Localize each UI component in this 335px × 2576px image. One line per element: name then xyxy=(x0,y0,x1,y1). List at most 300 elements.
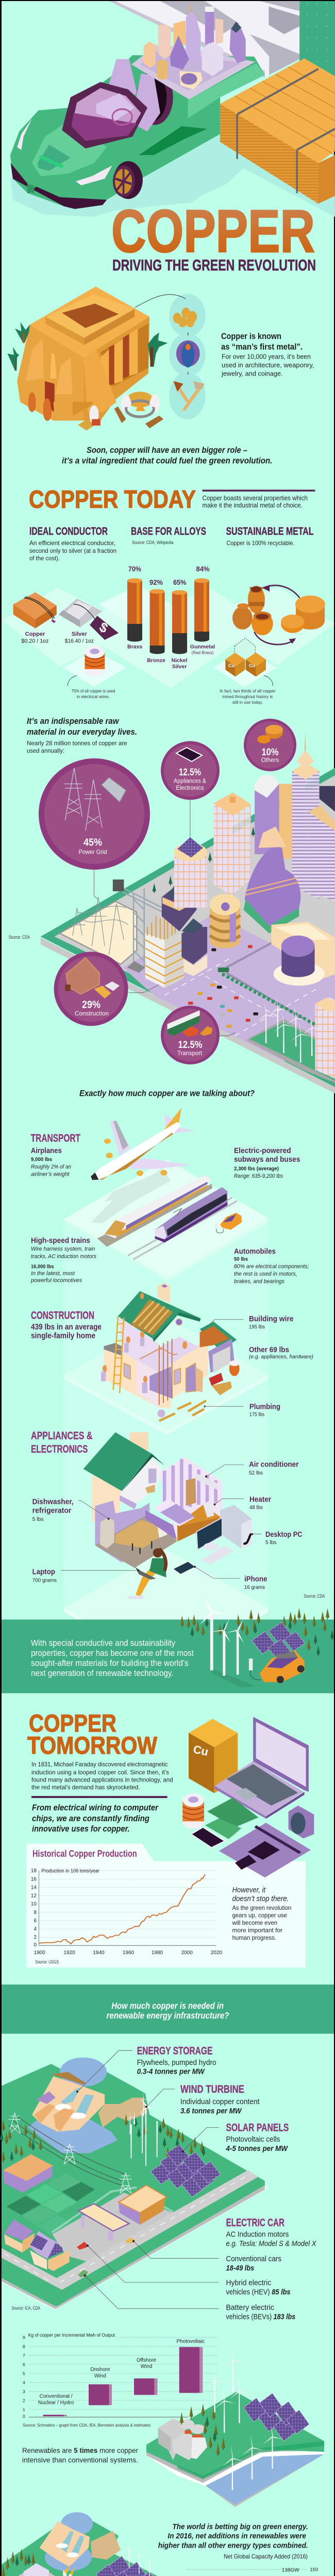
icon: phone xyxy=(176,748,202,761)
panel: green band with renewable scene: sought-after materials for building the world’s xyxy=(31,1658,189,1668)
transport labels: 50 lbs xyxy=(234,1257,248,1262)
bar chart: net global capacity added: 138GW xyxy=(282,2568,299,2573)
dam xyxy=(32,2076,105,2132)
renewable labels: vehicles (HEV) 85 lbs xyxy=(226,2289,291,2297)
appliances labels: refrigerator xyxy=(32,1506,72,1515)
heading: copper tomorrow xyxy=(27,1709,158,1759)
illustration: transport vehicles xyxy=(91,1108,242,1259)
circle: 10% others xyxy=(244,719,296,771)
heading: copper today xyxy=(29,486,315,513)
intro text: For over 10,000 years, it’s been xyxy=(222,353,311,361)
bar chart: kg of copper per MWh: Nuclear / Hydro xyxy=(38,2400,74,2406)
circle: 12.5% transport: Transport xyxy=(177,1049,203,1057)
silo towers xyxy=(255,784,279,854)
panel: ideal conductor: 75% of all copper is used xyxy=(71,688,115,693)
text block: betting big on green energy: Net Global Capacity Added (2016) xyxy=(224,2553,308,2560)
line chart: 1980 xyxy=(152,1950,163,1956)
icon: house frame xyxy=(65,958,120,998)
circle: appliances and electronics xyxy=(161,741,220,800)
bar chart: net global capacity added: 150 xyxy=(310,2567,318,2573)
bar chart: kg of copper per MWh xyxy=(23,2333,217,2428)
construction labels: CONSTRUCTION xyxy=(31,1310,94,1321)
text block: everyday uses: used annually: xyxy=(27,747,64,754)
solar round tower xyxy=(174,852,207,908)
question heading: Exactly how much copper are we talking about? xyxy=(79,1089,255,1098)
circle: 12.5% transport xyxy=(161,1006,220,1064)
construction labels: (e.g. appliances, hardware) xyxy=(249,1354,313,1360)
callout: renewables intensity: intensive than conventional systems. xyxy=(22,2455,138,2464)
renewable labels: Source: ICA, CDA xyxy=(11,2306,40,2311)
circle: 12.5% transport: 12.5% xyxy=(178,1040,203,1050)
appliances labels: 5 lbs xyxy=(32,1516,44,1522)
guitar building xyxy=(245,847,300,926)
appliances labels: Source: CDA xyxy=(304,1594,325,1599)
renewable labels: 4-5 tonnes per MW xyxy=(226,2145,288,2153)
gas station and building xyxy=(53,2193,173,2262)
callout: however: As the green revolution xyxy=(232,1904,291,1911)
panel: sustainable metal: Copper is 100% recyclable. xyxy=(226,539,294,547)
heading: copper today: COPPER TODAY xyxy=(29,486,196,513)
renewable labels: SOLAR PANELS xyxy=(226,2122,289,2134)
renewable labels: 0.3-4 tonnes per MW xyxy=(137,2068,205,2076)
text block: betting big on green energy: higher than all other energy types combined. xyxy=(158,2541,308,2550)
reactor xyxy=(158,2418,188,2460)
construction labels: 439 lbs in an average xyxy=(31,1323,102,1332)
panel: green band with renewable scene: next generation of renewable technology. xyxy=(31,1668,174,1678)
panel: ideal conductor: of the cost). xyxy=(29,554,60,562)
trees xyxy=(153,883,156,893)
transport labels: powerful locomotives xyxy=(30,1278,82,1284)
isometric floor behind properties xyxy=(2,586,334,688)
circle: 29% construction: 29% xyxy=(82,999,100,1011)
road xyxy=(2,2170,259,2290)
high-speed train xyxy=(97,1175,212,1247)
transport labels: Electric-powered xyxy=(234,1146,291,1155)
illustration: isometric city xyxy=(41,732,335,1093)
heading: copper tomorrow: COPPER xyxy=(29,1709,116,1737)
bar chart: kg of copper per MWh: 2 xyxy=(23,2398,25,2403)
panel: ideal conductor: IDEAL CONDUCTOR xyxy=(29,526,108,537)
bar chart: kg of copper per MWh: 3 xyxy=(23,2389,25,2394)
panel: base for alloys: 92% xyxy=(149,578,163,586)
transport labels: airliner’s weight xyxy=(31,1172,70,1178)
renewable labels: 3.6 tonnes per MW xyxy=(180,2107,242,2115)
line chart: 1920 xyxy=(64,1950,75,1956)
line chart: 4 xyxy=(34,1926,37,1932)
panel: sustainable metal: In fact, two thirds of all copper xyxy=(220,688,276,693)
city on the car xyxy=(131,3,255,99)
text block: Faraday: the red metal’s demand has skyrocketed. xyxy=(31,1784,140,1791)
lake xyxy=(60,2058,107,2087)
renewable labels: ELECTRIC CAR xyxy=(226,2217,284,2229)
line chart: 14 xyxy=(31,1885,37,1891)
panel: green band with renewable scene xyxy=(2,1597,334,1693)
tram xyxy=(128,1187,237,1259)
bar chart: kg of copper per MWh: 9 xyxy=(23,2335,25,2340)
panel: historical copper production xyxy=(26,1843,306,1968)
text block: Faraday xyxy=(31,1761,173,1834)
circle: appliances and electronics: Appliances & xyxy=(174,778,206,784)
text block: everyday uses: Nearly 28 million tonnes of copper are xyxy=(27,740,127,747)
text block: Faraday: innovative uses for copper. xyxy=(32,1824,130,1834)
workers xyxy=(103,1293,187,1383)
illustration: house under construction xyxy=(101,1283,244,1421)
renewable labels: Photovoltaic cells xyxy=(226,2136,280,2144)
transport labels: Airplanes xyxy=(31,1146,62,1155)
road lines and lots xyxy=(226,942,306,1020)
connector lines xyxy=(94,800,235,1036)
transport labels: TRANSPORT xyxy=(31,1132,80,1144)
construction labels: Plumbing xyxy=(249,1402,280,1411)
transport labels: brakes, and bearings xyxy=(234,1279,284,1285)
icon: pots xyxy=(257,725,283,743)
construction building xyxy=(145,931,183,988)
panel: ideal conductor: in electrical wires. xyxy=(77,694,110,699)
turbines xyxy=(123,2541,136,2568)
line chart: 6 xyxy=(34,1918,37,1924)
renewable labels: Hybrid electric xyxy=(226,2279,271,2287)
heading: copper tomorrow: TOMORROW xyxy=(27,1732,158,1759)
panel: ideal conductor: Silver xyxy=(72,631,88,637)
bar chart: kg of copper per MWh: 8 xyxy=(23,2344,25,2349)
bar chart: kg of copper per MWh: 0 xyxy=(23,2414,25,2419)
monitor and tower xyxy=(220,1505,252,1549)
appliances labels: 48 lbs xyxy=(249,1504,263,1511)
illustration: stacked copper sheets xyxy=(220,58,335,204)
band: renewable question xyxy=(2,1985,334,2034)
panel: base for alloys: Brass xyxy=(127,644,142,650)
renewable labels: Conventional cars xyxy=(226,2255,281,2263)
panel: ideal conductor: Copper xyxy=(25,631,45,637)
line chart: 10 xyxy=(31,1901,37,1907)
appliances labels: Desktop PC xyxy=(265,1530,303,1539)
panel: base for alloys: Silver xyxy=(172,664,187,670)
arena xyxy=(271,922,335,978)
renewable labels: AC Induction motors xyxy=(226,2230,289,2239)
renewable labels: ENERGY STORAGE xyxy=(137,2045,212,2057)
illustration: green convertible car carrying a city xyxy=(10,3,335,217)
line chart: 2 xyxy=(34,1935,37,1940)
crane xyxy=(122,887,177,968)
fire camp workers xyxy=(127,392,153,408)
line chart: 8 xyxy=(34,1910,37,1916)
line chart: 2000 xyxy=(181,1950,193,1956)
heading: copper today: make it the industrial metal of choice. xyxy=(202,502,303,509)
turbines xyxy=(256,1003,277,1043)
renewable labels: Individual copper content xyxy=(180,2098,260,2106)
toolbox and coil xyxy=(209,1373,223,1386)
text block: betting big on green energy: The world is betting big on green energy. xyxy=(172,2522,308,2531)
roof xyxy=(118,1291,201,1338)
callout: however: doesn’t stop there. xyxy=(232,1895,289,1903)
transport labels: Automobiles xyxy=(234,1247,276,1256)
panel: base for alloys: Bronze xyxy=(147,657,165,664)
callout: however: However, it xyxy=(232,1886,266,1894)
circle: 45% power grid: Power Grid xyxy=(78,848,107,855)
source: Source: CDA xyxy=(9,935,30,940)
panel: sustainable metal xyxy=(220,526,325,705)
transport labels: 9,000 lbs xyxy=(31,1157,52,1162)
text block: Faraday: found many advanced applications in technology, and xyxy=(31,1776,173,1784)
panel: sustainable metal: Cu xyxy=(228,663,234,668)
translucent column behind the three platforms xyxy=(64,1159,268,1671)
renewable labels: vehicles (BEVs) 183 lbs xyxy=(226,2313,295,2321)
panel: sustainable metal: Cu xyxy=(249,663,255,668)
transport labels: the rest is used in motors, xyxy=(234,1271,297,1277)
transport labels: Wire harness system, train xyxy=(31,1246,95,1252)
illustration: ancient Egyptian temple xyxy=(8,286,206,420)
connectors xyxy=(85,2089,219,2309)
cliffs xyxy=(98,2097,147,2127)
line chart: 2020 xyxy=(211,1950,223,1956)
illustration: copper cube, laptop and electronics xyxy=(182,1717,314,1877)
appliances labels: Air conditioner xyxy=(249,1460,299,1469)
icon: pylons xyxy=(64,768,126,831)
text block: everyday uses: It’s an indispensable raw xyxy=(27,717,120,726)
transport labels: High-speed trains xyxy=(31,1236,90,1245)
line chart: 1940 xyxy=(93,1950,105,1956)
circle: 10% others: 10% xyxy=(262,747,279,758)
circle: 29% construction: Construction xyxy=(75,1010,109,1017)
intro text: used in architecture, weaponry, xyxy=(222,362,314,369)
parking tower xyxy=(210,904,240,941)
pylons and power lines xyxy=(9,2115,126,2185)
right bottom tower xyxy=(315,997,335,1078)
appliances labels: ELECTRONICS xyxy=(31,1443,88,1455)
transport labels: Range: 635-9,200 lbs xyxy=(234,1173,283,1179)
icon: recycling pots and cubes xyxy=(225,585,325,686)
circle: 45% power grid: 45% xyxy=(83,837,102,848)
bar chart: kg of copper per MWh: Source: Schroders – graph from CDA, IEA, Bernstein analysis & estimates xyxy=(23,2422,150,2428)
transport labels: In the latest, most xyxy=(31,1270,75,1277)
illustration: renewable energy landscape map xyxy=(0,2058,268,2310)
icon: copper sheets and silver bars: $ xyxy=(97,619,110,636)
icon: bus and cars xyxy=(167,1010,212,1037)
appliances labels: Heater xyxy=(249,1495,271,1504)
appliances labels: 52 lbs xyxy=(249,1470,263,1476)
transport labels: 2,300 lbs (average) xyxy=(234,1166,279,1172)
text block: Faraday: chips, we are constantly finding xyxy=(32,1814,150,1823)
bar chart: kg of copper per MWh: Offshore xyxy=(137,2358,157,2363)
callout: green revolution: Soon, copper will have an even bigger role – xyxy=(87,446,247,455)
cars xyxy=(77,2242,88,2250)
bar chart: net global capacity added xyxy=(116,2567,318,2576)
renewable labels xyxy=(11,2045,317,2321)
bar chart: kg of copper per MWh: 1 xyxy=(23,2407,25,2412)
text block: betting big on green energy: In 2016, net additions in renewables were xyxy=(167,2532,306,2540)
band: renewable question: How much copper is needed in xyxy=(111,2001,224,2011)
line chart xyxy=(31,1868,223,1956)
circle: 45% power grid xyxy=(39,758,150,870)
line chart: 1900 xyxy=(34,1950,45,1956)
intro text: Copper is known xyxy=(221,331,281,341)
callout: renewables intensity xyxy=(22,2446,138,2464)
cube xyxy=(189,1719,238,1793)
round icons xyxy=(169,294,206,337)
solar xyxy=(96,2565,119,2576)
plane shadow xyxy=(91,1168,171,1224)
callout: however: gears up, copper use xyxy=(232,1912,287,1919)
illustration: power plant island xyxy=(1,2512,179,2576)
illustration: coastal island with turbines and solar xyxy=(146,2346,324,2507)
callout: green revolution: it’s a vital ingredient that could fuel the green revolution. xyxy=(62,456,272,466)
houses xyxy=(4,2219,33,2241)
bar chart: kg of copper per MWh: 5 xyxy=(23,2371,25,2376)
circle: 10% others: Others xyxy=(261,757,279,764)
panel: ideal conductor: $16.40 / 1oz xyxy=(65,638,94,644)
peach tower xyxy=(213,803,233,896)
appliances labels: Laptop xyxy=(32,1568,55,1577)
line chart: 18 xyxy=(31,1868,37,1874)
construction labels xyxy=(31,1310,313,1417)
plane xyxy=(91,1108,195,1180)
line chart: 0 xyxy=(34,1942,37,1948)
panel: green band with renewable scene: With special conductive and sustainability xyxy=(31,1638,175,1648)
bar chart: kg of copper per MWh: Wind xyxy=(141,2364,152,2369)
renewable labels: 18-49 lbs xyxy=(226,2264,254,2273)
panel: base for alloys: BASE FOR ALLOYS xyxy=(131,526,206,537)
text block: Faraday: induction using a looped copper coil. Since then, it’s xyxy=(31,1769,169,1776)
transport labels: Roughly 2% of an xyxy=(31,1164,71,1170)
trees xyxy=(180,2404,225,2455)
turbines xyxy=(124,2110,137,2134)
intro text: as “man’s first metal”. xyxy=(221,342,303,351)
text block: Faraday: From electrical wiring to computer xyxy=(32,1803,159,1812)
coil xyxy=(182,1801,204,1822)
bar chart: kg of copper per MWh: 6 xyxy=(23,2362,25,2367)
panel: base for alloys: (Red Brass) xyxy=(192,651,214,655)
elevated road behind the car xyxy=(109,1,335,88)
panel: green band with renewable scene: properties, copper has become one of the most xyxy=(31,1648,194,1658)
pipes and wires xyxy=(159,1338,172,1405)
intro text: jewelry, and coinage. xyxy=(221,370,282,377)
intro text xyxy=(221,331,314,377)
ladder xyxy=(113,1316,124,1393)
appliances labels: iPhone xyxy=(244,1574,267,1583)
line chart: 16 xyxy=(31,1876,37,1883)
construction labels: single-family home xyxy=(31,1332,95,1341)
bar chart: kg of copper per MWh: Photovoltaic xyxy=(176,2338,205,2344)
bar chart: kg of copper per MWh: Kg of copper per Incremental Mwh of Output xyxy=(28,2333,115,2338)
circle: 29% construction xyxy=(54,952,128,1026)
renewable labels: e.g. Tesla: Model S & Model X xyxy=(226,2240,317,2248)
connector: energy storage xyxy=(77,2050,132,2092)
temple base, workers and logs xyxy=(28,399,188,431)
laptop and boards xyxy=(182,1717,314,1877)
panel: base for alloys: Source: CDA, Wikipedia xyxy=(132,540,173,545)
door and windows xyxy=(186,1363,196,1392)
fields xyxy=(6,2196,41,2215)
text block: everyday uses xyxy=(27,717,137,754)
cylinders chart xyxy=(127,578,209,654)
bar chart: kg of copper per MWh: Onshore xyxy=(90,2367,110,2372)
appliances labels xyxy=(31,1430,325,1599)
solar field xyxy=(150,2163,174,2184)
callout: however: will become even xyxy=(232,1919,277,1926)
appliances labels: 16 grams xyxy=(244,1584,265,1590)
text block: everyday uses: material in our everyday lives. xyxy=(27,727,137,737)
panel: sustainable metal: still in use today. xyxy=(232,700,263,705)
panel: ideal conductor: An efficient electrical conductor, xyxy=(29,539,115,547)
connectors xyxy=(61,1465,262,1579)
panel: ideal conductor: second only to silver (at a fraction xyxy=(29,547,116,554)
panel: base for alloys: 84% xyxy=(196,565,210,573)
construction labels: Other 69 lbs xyxy=(249,1346,289,1354)
illustration: cutaway home with appliances xyxy=(61,1432,262,1599)
palms xyxy=(8,322,167,370)
electric car and charger xyxy=(215,1213,242,1233)
callout: renewables intensity: Renewables are 5 times more copper xyxy=(22,2446,138,2454)
construction labels: Building wire xyxy=(249,1314,294,1323)
woman with laptop xyxy=(128,1548,166,1599)
illustration: copper cube, laptop and electronics: Cu xyxy=(192,1742,210,1758)
panel: base for alloys: 65% xyxy=(173,578,187,586)
panel: base for alloys xyxy=(127,526,215,670)
transport labels xyxy=(30,1132,309,1285)
panel: ideal conductor: $0.20 / 1oz xyxy=(22,638,48,644)
line chart: Production in 106 tons/year xyxy=(41,1869,99,1874)
panel: base for alloys: Gunmetal xyxy=(190,644,215,650)
heading: copper today: Copper boasts several properties which xyxy=(202,495,308,502)
panel: ideal conductor xyxy=(13,526,119,699)
turbines xyxy=(223,2445,244,2490)
panel: base for alloys: Nickel xyxy=(172,657,188,664)
circle: appliances and electronics: 12.5% xyxy=(179,767,201,778)
line chart: 1960 xyxy=(123,1950,135,1956)
transport labels: 80% are electrical components; xyxy=(234,1264,309,1270)
illustration: turbines, solar panels, electric car xyxy=(180,1597,334,1687)
bar chart: kg of copper per MWh: 7 xyxy=(23,2353,25,2358)
renewable labels: Battery electric xyxy=(226,2304,274,2312)
phone xyxy=(173,1562,195,1574)
substation xyxy=(71,897,128,955)
plant lots xyxy=(8,2565,56,2576)
copper pipes xyxy=(177,1401,206,1416)
appliances labels: APPLIANCES & xyxy=(31,1430,93,1442)
icon: copper sheets and silver bars xyxy=(13,592,119,686)
panel: historical copper production: Historical Copper Production xyxy=(32,1849,137,1859)
band: renewable question: renewable energy infrastructure? xyxy=(106,2010,229,2021)
transport labels: subways and buses xyxy=(234,1155,300,1164)
callout: however xyxy=(232,1886,291,1941)
transport labels: 16,000 lbs xyxy=(31,1264,54,1270)
transport labels: tracks, AC induction motors xyxy=(31,1253,96,1260)
bedroom xyxy=(159,1457,222,1541)
panel: sustainable metal: mined throughout history is xyxy=(222,694,273,699)
pines left xyxy=(0,2114,206,2162)
circle: appliances and electronics: Electronics xyxy=(176,785,204,791)
text block: betting big on green energy xyxy=(158,2522,308,2560)
renewable labels: Flywheels, pumped hydro xyxy=(137,2059,216,2067)
panel: base for alloys: 70% xyxy=(128,565,141,573)
construction labels: 195 lbs xyxy=(249,1324,265,1330)
garage xyxy=(200,1321,237,1350)
appliances labels: 5 lbs xyxy=(265,1539,276,1546)
solar xyxy=(244,2398,266,2422)
renewable labels: WIND TURBINE xyxy=(180,2083,244,2095)
bar chart: kg of copper per MWh: Wind xyxy=(94,2373,106,2379)
callout: green revolution xyxy=(62,446,272,466)
line chart: 12 xyxy=(31,1893,37,1899)
appliances labels: 700 grams xyxy=(32,1578,57,1584)
bar chart: kg of copper per MWh: Conventional / xyxy=(40,2394,73,2399)
dark roof buildings xyxy=(162,883,196,931)
construction labels: 175 lbs xyxy=(249,1411,264,1417)
icon: copper wire coil xyxy=(85,646,105,676)
bar chart: kg of copper per MWh: 4 xyxy=(23,2380,25,2385)
text block: Faraday: In 1831, Michael Faraday discovered electromagnetic xyxy=(31,1761,167,1768)
callout: however: more important for xyxy=(232,1927,282,1934)
